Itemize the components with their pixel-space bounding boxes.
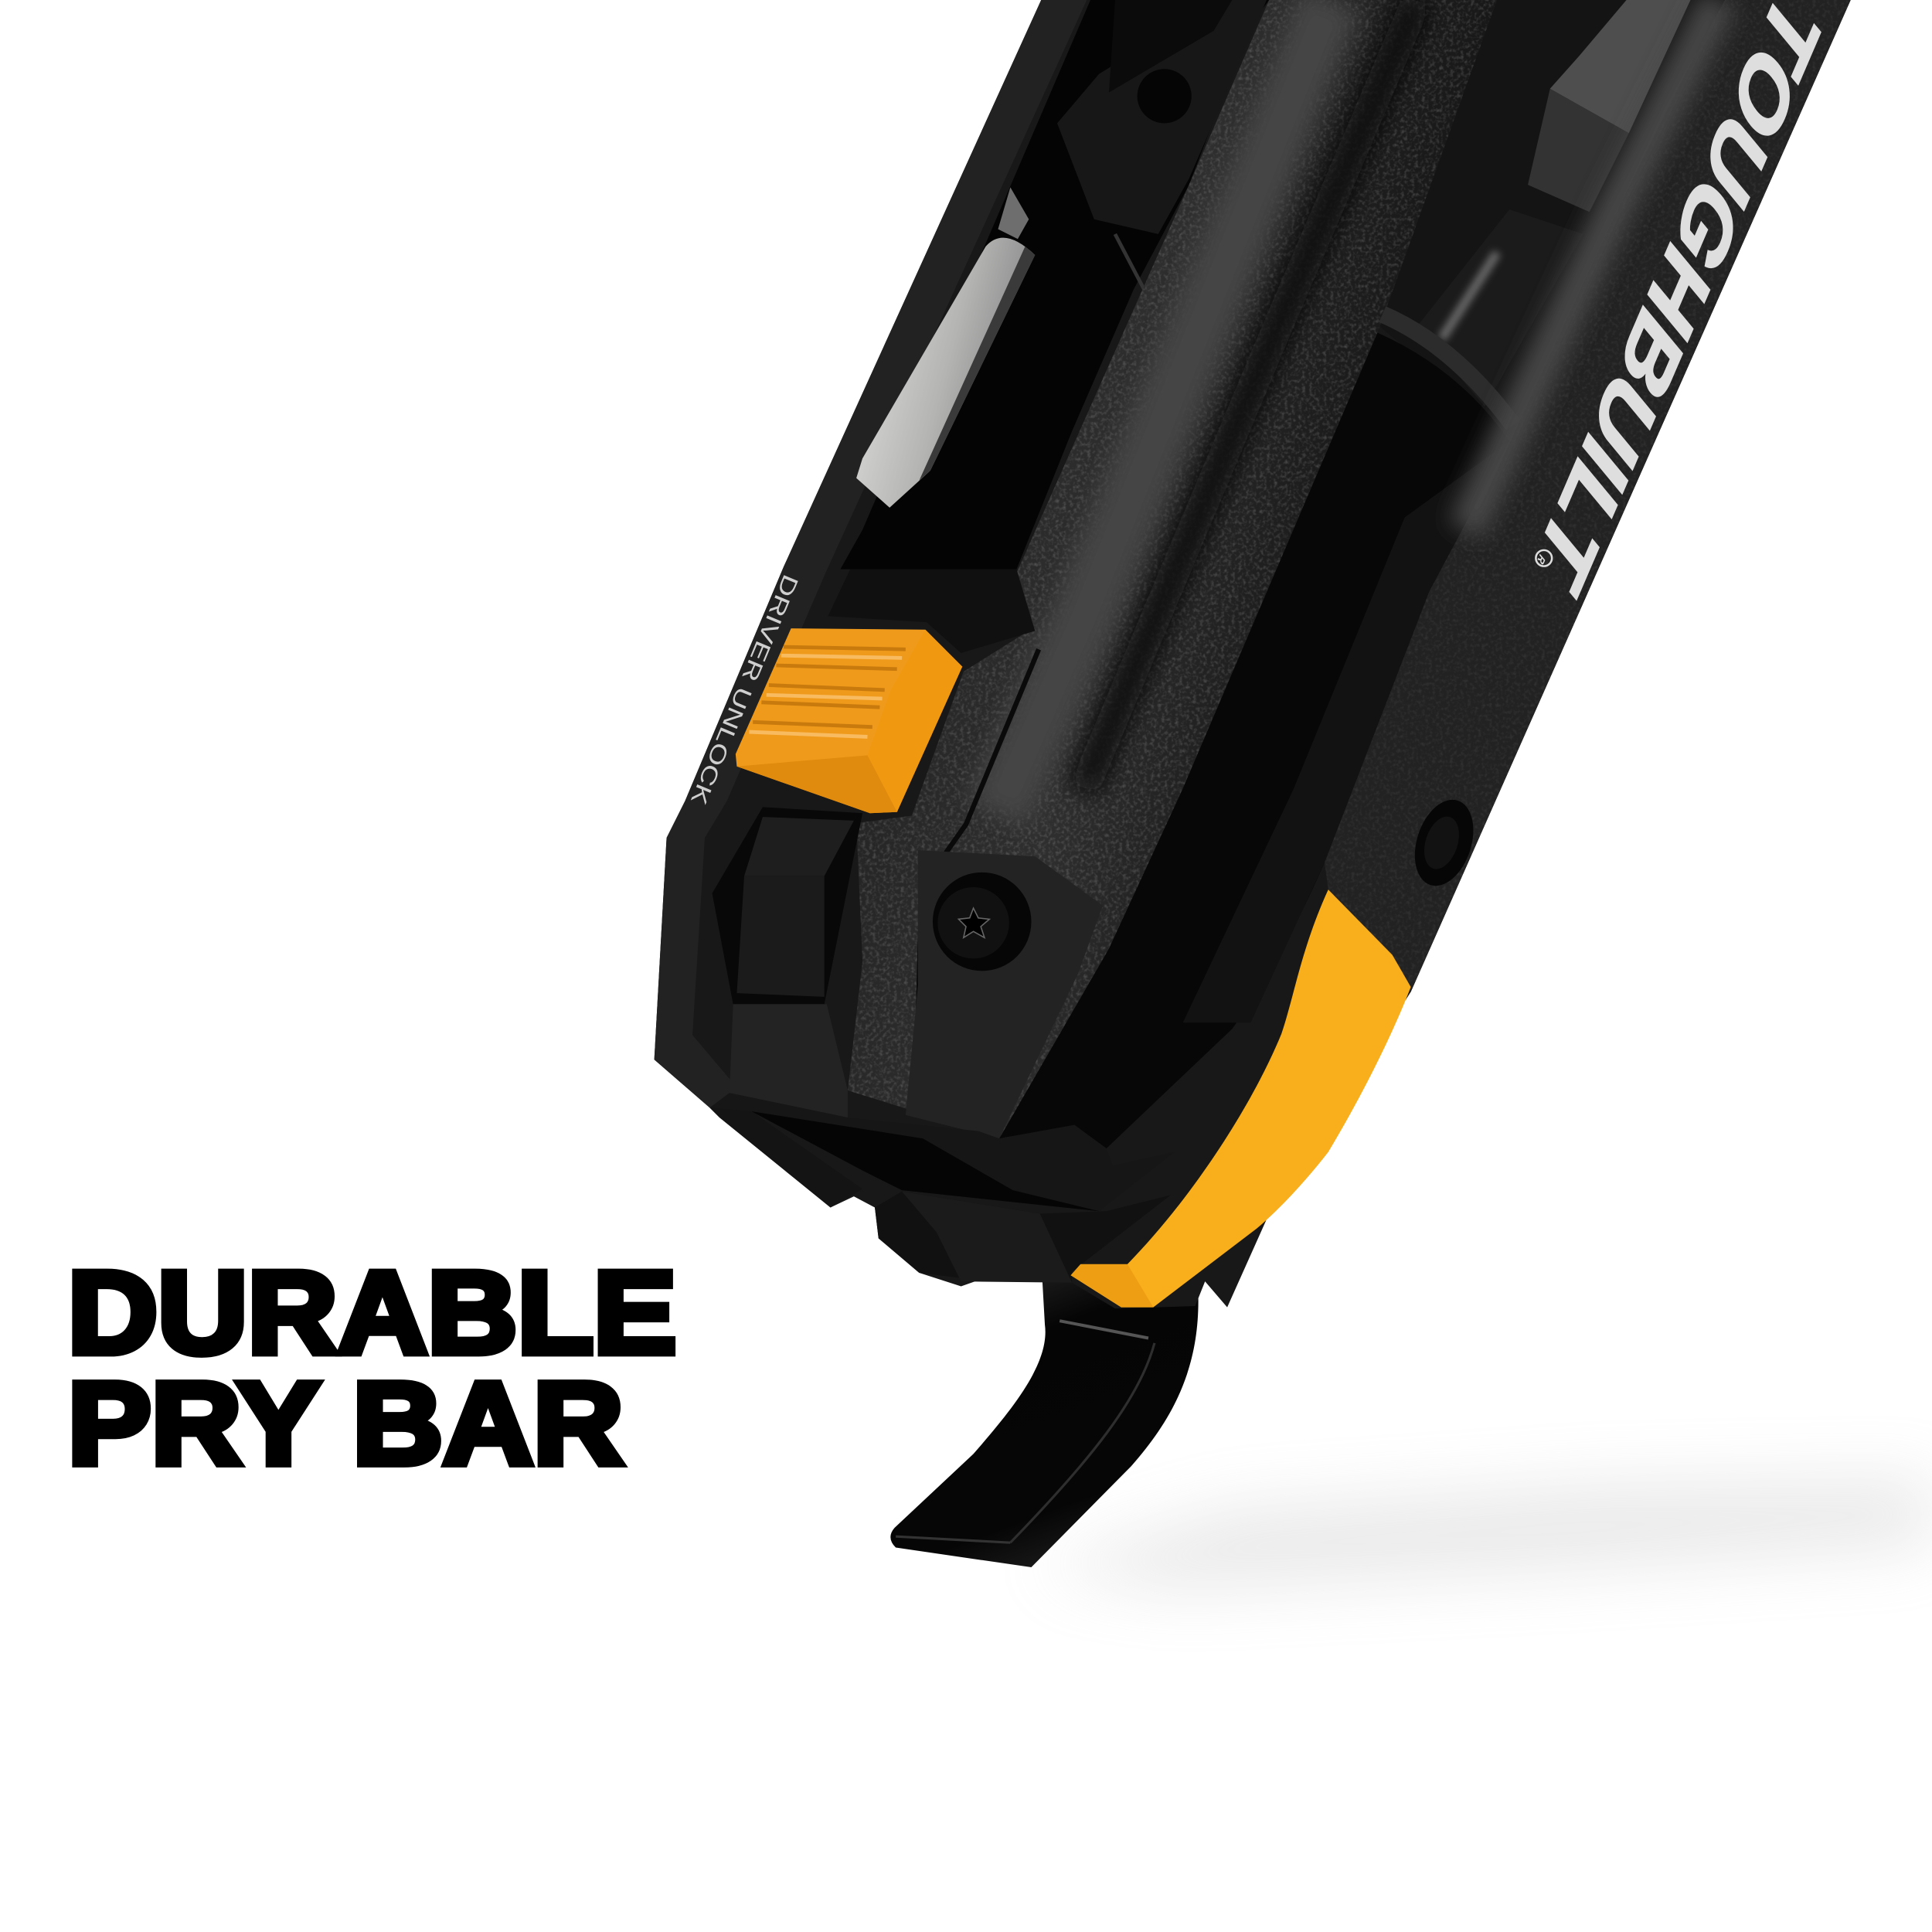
- yellow bumper: [1071, 889, 1411, 1308]
- lower latch block: [713, 807, 862, 1117]
- front screw: [933, 872, 1032, 971]
- registered mark: R: [1536, 551, 1547, 568]
- heading: durable pry bar: [68, 1248, 676, 1489]
- textured handle: [848, 0, 1497, 1138]
- heading: durable pry bar: DURABLE: [68, 1248, 676, 1379]
- lower tabs: [709, 1093, 1174, 1283]
- screwdriver shaft and hex bit: [1380, 0, 1725, 437]
- orange unlock button: [736, 628, 962, 813]
- screw plate: [906, 850, 1103, 1138]
- tool window: [840, 0, 1269, 570]
- rear screw: [1405, 792, 1484, 893]
- folded pliers: [1057, 0, 1267, 335]
- black blade: [999, 332, 1509, 1148]
- registered mark: [1536, 550, 1552, 568]
- pry bar: [890, 1281, 1199, 1567]
- driver unlock label: DRIVER UNLOCK: [685, 571, 803, 808]
- floor shadow: [1035, 1478, 1932, 1590]
- flathead bit: [856, 187, 1035, 508]
- left rim: [655, 0, 1087, 1107]
- right cover: [1325, 0, 1851, 992]
- button recess: [828, 570, 1035, 653]
- tool body: [655, 0, 1851, 1308]
- heading: durable pry bar: PRY BAR: [68, 1359, 624, 1489]
